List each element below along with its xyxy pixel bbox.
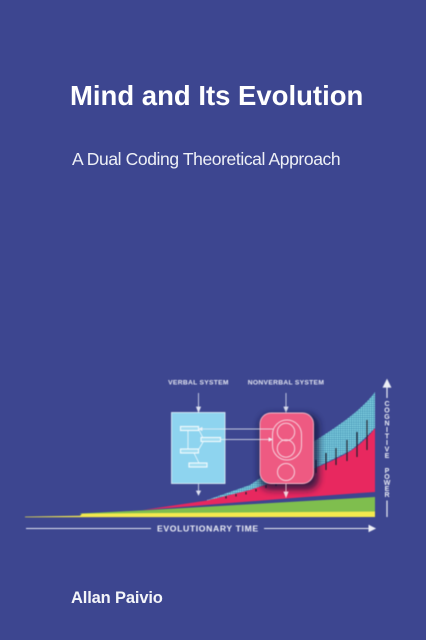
- label: cognitive power (vertical stacked): P: [385, 468, 390, 475]
- label: cognitive power (vertical stacked): V: [385, 446, 390, 454]
- author: Allan Paivio: [71, 589, 163, 607]
- arrow: cognitive power up: [384, 380, 390, 398]
- black tick bars linking teal and red bands: [226, 420, 367, 498]
- title: Mind and Its Evolution: [70, 80, 363, 111]
- label: cognitive power (vertical stacked): E: [385, 453, 390, 460]
- panel: verbal system box: [172, 412, 225, 484]
- label: evolutionary time: EVOLUTIONARY TIME: [157, 524, 259, 534]
- arrow: evolutionary time left segment: [26, 528, 151, 530]
- area: teal dotted band: [207, 392, 375, 501]
- subtitle: A Dual Coding Theoretical Approach: [72, 149, 340, 169]
- arrows: referential links between systems: [199, 428, 273, 441]
- arrow: nonverbal output: [284, 484, 288, 497]
- area: red band: [143, 428, 375, 510]
- area: green band: [80, 497, 375, 514]
- nonverbal system label: NONVERBAL SYSTEM: [248, 379, 324, 386]
- verbal system label: VERBAL SYSTEM: [168, 379, 229, 386]
- area: yellow band: [25, 512, 375, 517]
- panel shadow: [259, 414, 319, 490]
- axis line: cognitive power lower segment: [386, 500, 388, 517]
- label: cognitive power (vertical stacked): T: [385, 434, 390, 440]
- label: cognitive power (vertical stacked): [384, 401, 391, 499]
- nonverbal linked circles: [272, 420, 302, 480]
- label: cognitive power (vertical stacked): G: [384, 414, 390, 421]
- panel: nonverbal system box: [260, 413, 314, 484]
- label: cognitive power (vertical stacked): R: [384, 492, 390, 499]
- label: cognitive power (vertical stacked): I: [386, 427, 388, 434]
- label: cognitive power (vertical stacked): O: [384, 408, 390, 414]
- arrow: nonverbal input: [284, 393, 288, 412]
- arrow: verbal output: [196, 484, 200, 495]
- verbal flow connectors: [188, 430, 203, 463]
- label: cognitive power (vertical stacked): N: [384, 420, 390, 428]
- arrow: verbal input: [196, 393, 200, 412]
- label: cognitive power (vertical stacked): O: [384, 474, 390, 481]
- label: cognitive power (vertical stacked): I: [386, 440, 388, 447]
- label: cognitive power (vertical stacked): E: [385, 486, 390, 493]
- label: cognitive power (vertical stacked): C: [384, 401, 390, 408]
- arrow: evolutionary time: [264, 526, 375, 532]
- label: cognitive power (vertical stacked): W: [384, 480, 391, 487]
- verbal flow nodes: [180, 426, 220, 467]
